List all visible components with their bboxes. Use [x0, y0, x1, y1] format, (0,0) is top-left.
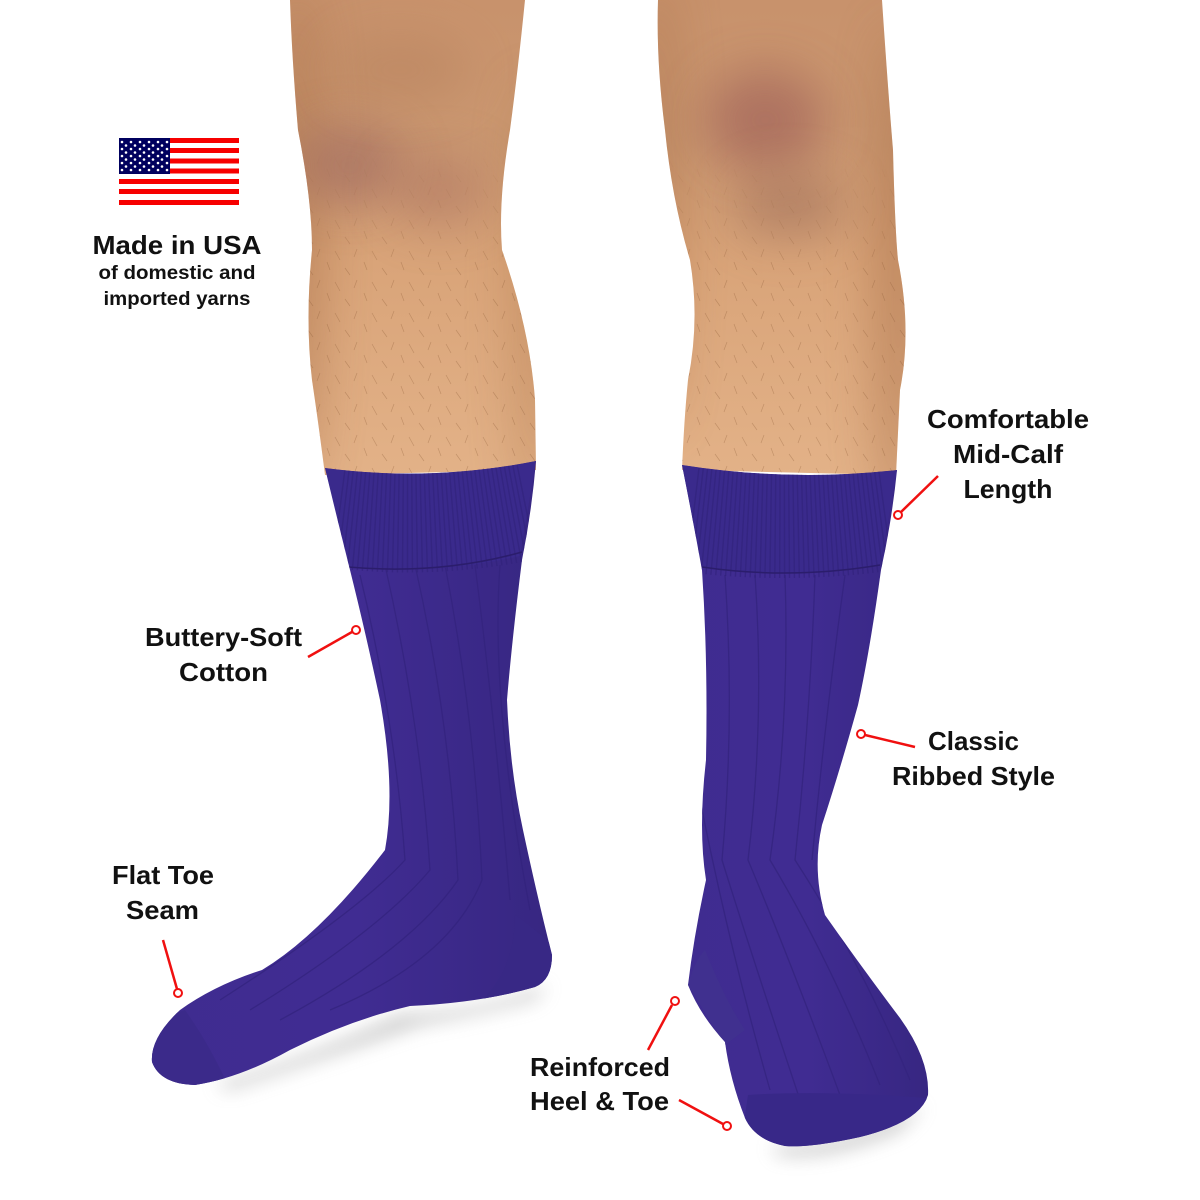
callout: comfortable mid-calf length: Length: [964, 474, 1052, 504]
callout: flat toe seam: Seam: [126, 895, 199, 925]
shadow: right foot: [770, 1105, 925, 1156]
callout: flat toe seam: [112, 860, 214, 997]
callout: reinforced heel and toe: [530, 997, 731, 1130]
callout: comfortable mid-calf length: Mid-Calf: [953, 439, 1063, 469]
made in USA text: imported yarns: [104, 289, 250, 310]
left leg: [290, 0, 536, 475]
callout: comfortable mid-calf length: [894, 404, 1089, 519]
callout: reinforced heel and toe: Heel & Toe: [530, 1086, 669, 1116]
callout: classic ribbed style: Classic: [928, 726, 1019, 756]
left sock: [152, 461, 552, 1085]
flag: USA: [119, 138, 239, 205]
made in USA text: [92, 230, 262, 310]
callout: buttery-soft cotton: [145, 622, 360, 687]
callout: flat toe seam: Flat Toe: [112, 860, 214, 890]
right sock ribs: [702, 575, 882, 1094]
callout: classic ribbed style: [857, 726, 1055, 791]
right sock: [682, 465, 928, 1146]
callout: classic ribbed style: Ribbed Style: [892, 761, 1055, 791]
shadow: left foot: [215, 985, 548, 1090]
right sock toe: [740, 1093, 928, 1150]
callout: buttery-soft cotton: Buttery-Soft: [145, 622, 302, 652]
made in USA text: of domestic and: [98, 263, 256, 284]
right sock cuff: [682, 465, 897, 573]
made in USA text: Made in USA: [92, 230, 262, 260]
left sock cuff: [325, 461, 536, 569]
callout: reinforced heel and toe: Reinforced: [530, 1052, 670, 1082]
left sock heel: [483, 942, 552, 999]
left sock ribs: [220, 568, 485, 1020]
callout: comfortable mid-calf length: Comfortable: [927, 404, 1089, 434]
callout: buttery-soft cotton: Cotton: [179, 657, 268, 687]
right leg: [658, 0, 906, 474]
right sock heel: [688, 984, 726, 1045]
left sock toe: [152, 1012, 225, 1085]
